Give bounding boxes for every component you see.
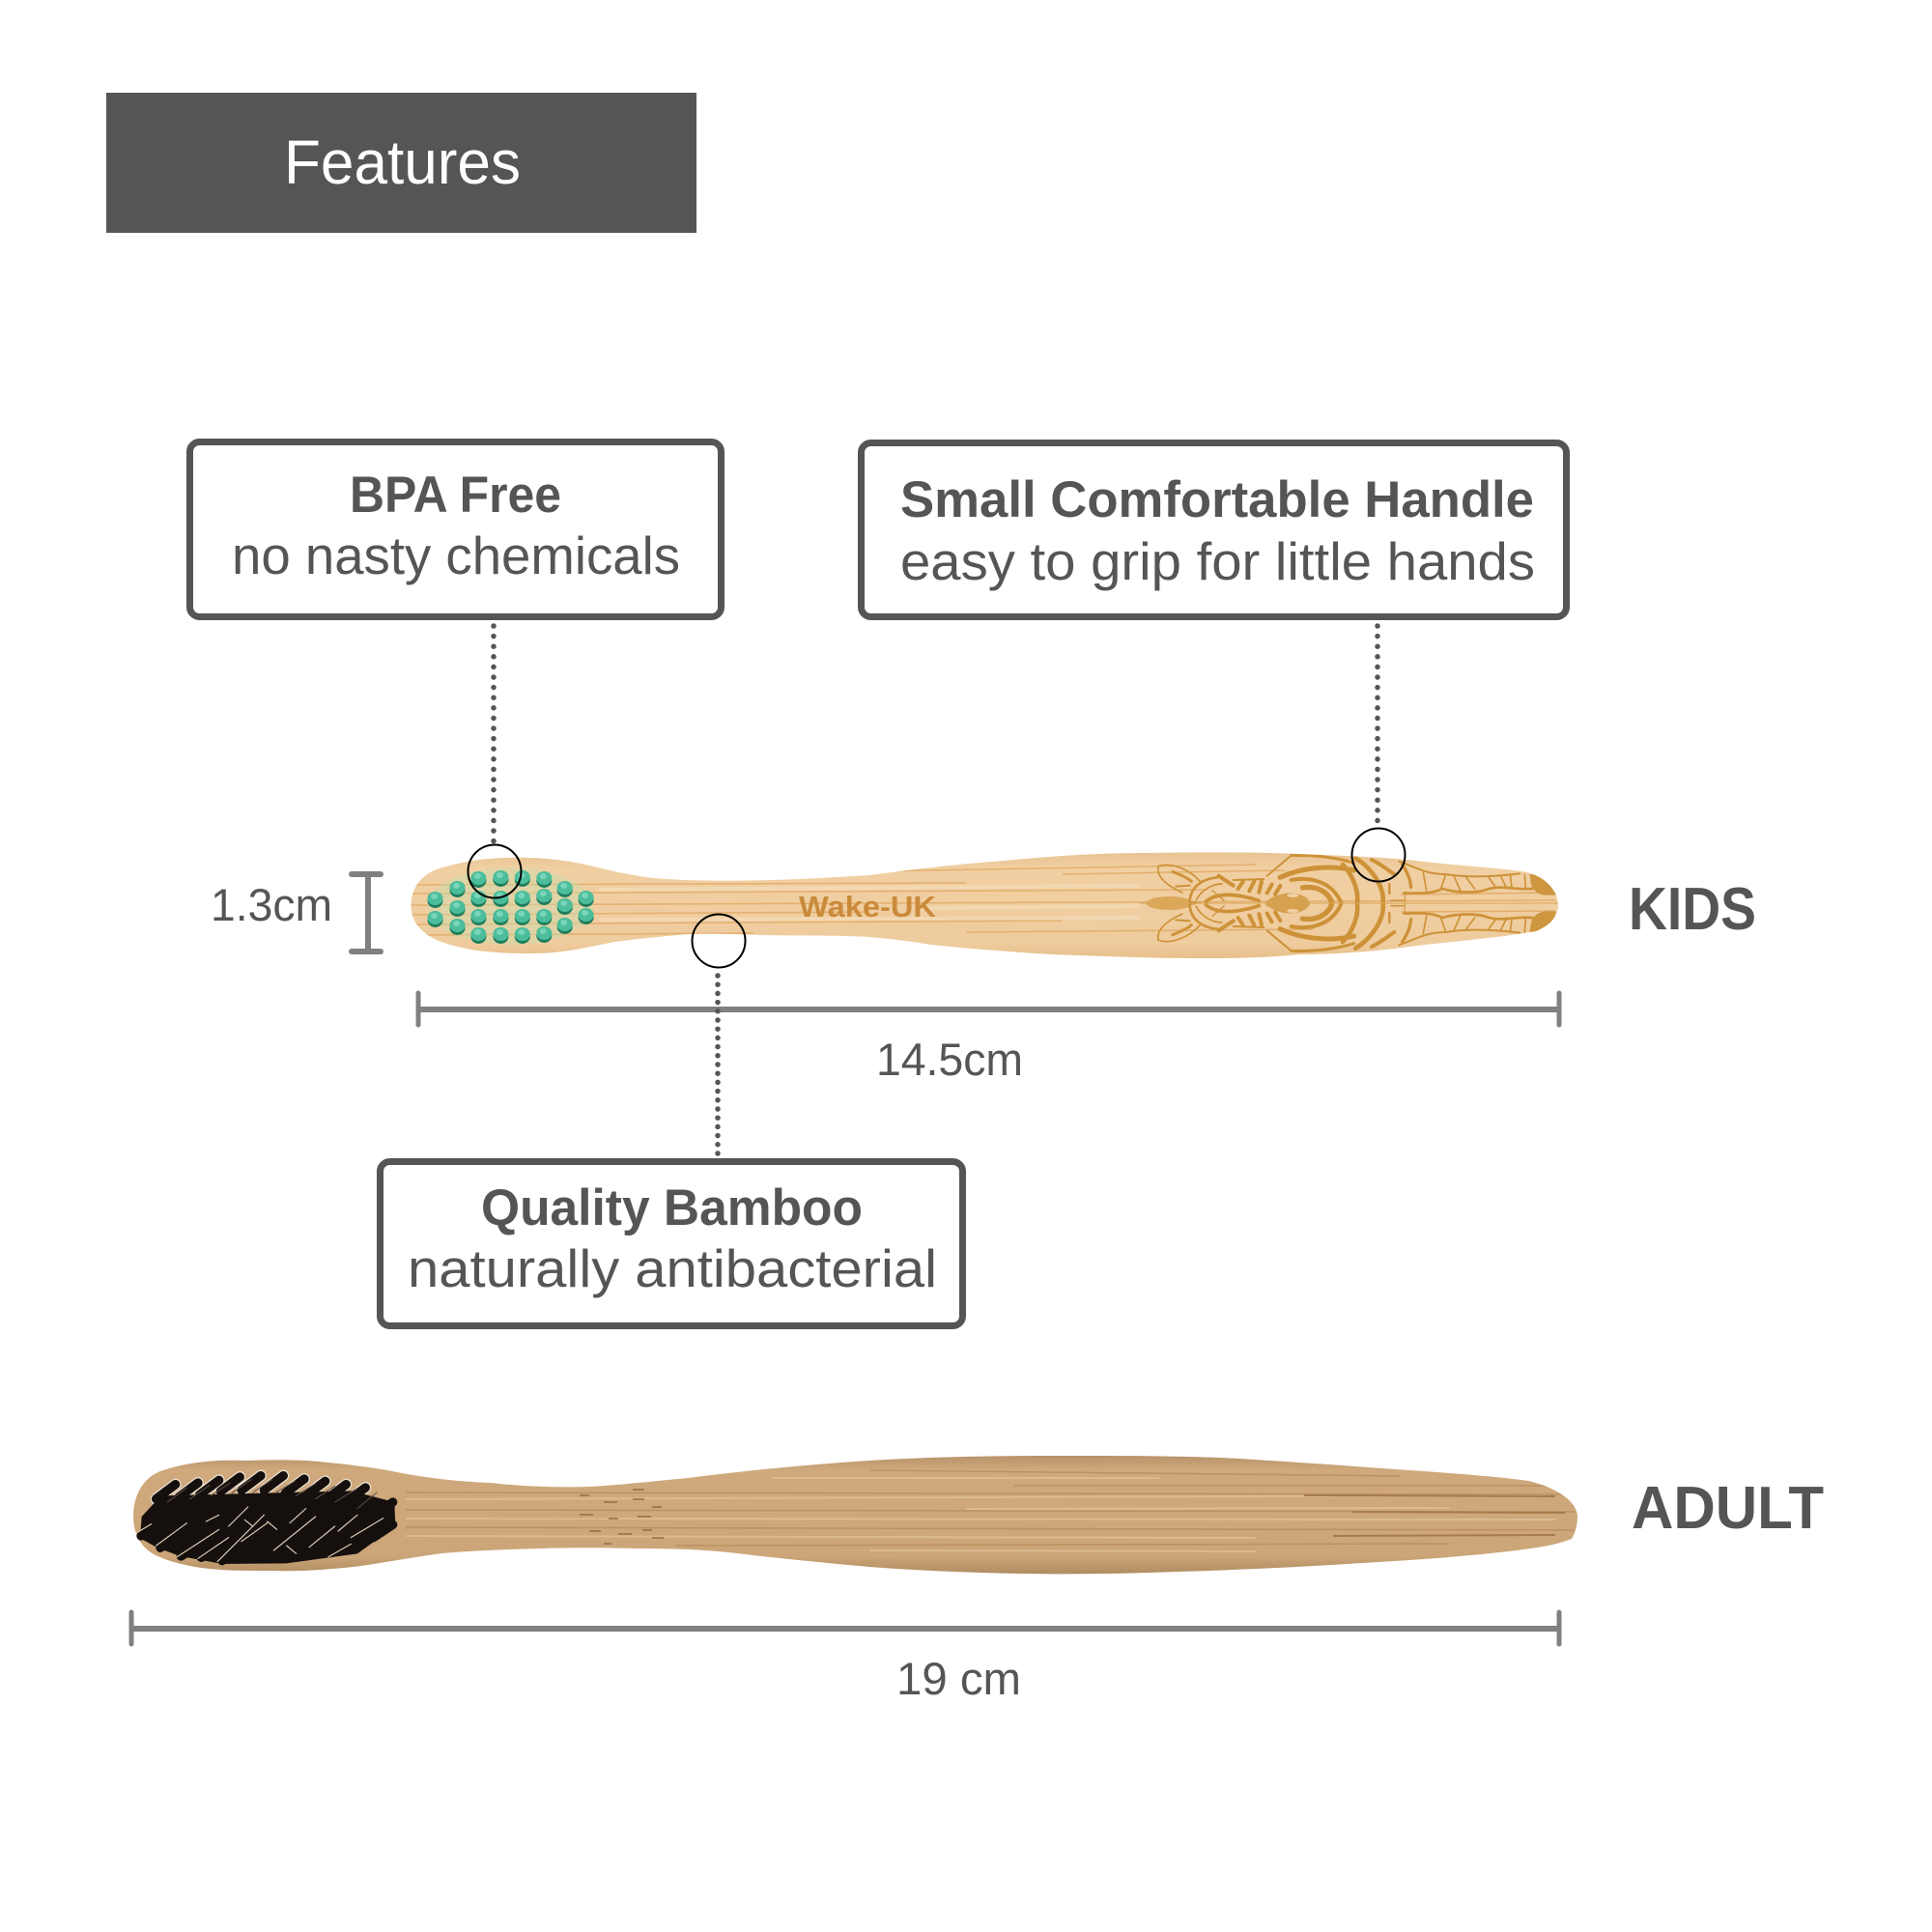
dimension: kids head height 1.3cm: 1.3cm — [211, 879, 332, 930]
heading: Features — [106, 93, 696, 233]
connector: handle callout to zebra handle — [1375, 626, 1380, 826]
label: KIDS: KIDS — [1629, 876, 1756, 943]
dimension: adult length 19 cm — [131, 1612, 1559, 1704]
label: ADULT: ADULT — [1632, 1475, 1824, 1542]
callout: Small Comfortable Handle: easy to grip for little hands — [900, 531, 1535, 591]
black bristles — [137, 1476, 395, 1564]
dimension: adult length 19 cm: 19 cm — [896, 1653, 1021, 1704]
adult toothbrush — [133, 1456, 1584, 1574]
marker circle: handle — [1352, 829, 1405, 881]
bristle bed tint — [427, 867, 593, 945]
callout: Quality Bamboo — [381, 1161, 962, 1325]
callout: BPA Free: BPA Free — [350, 467, 561, 524]
kids toothbrush — [411, 852, 1558, 958]
marker circle: bristles — [468, 844, 522, 898]
brand engraving: Wake-UK: Wake-UK — [799, 890, 937, 923]
dimension: kids length 14.5cm: 14.5cm — [876, 1034, 1023, 1085]
dimension: kids length 14.5cm — [418, 993, 1559, 1085]
heading: Features: Features — [284, 128, 521, 197]
bamboo node — [580, 1490, 664, 1544]
callout: BPA Free — [189, 442, 721, 616]
dimension: kids head height 1.3cm — [211, 874, 381, 952]
callout: Small Comfortable Handle — [862, 442, 1567, 616]
green bristles — [427, 870, 594, 944]
marker circle: bamboo neck — [692, 914, 746, 968]
connector: bamboo neck to callout — [715, 976, 721, 1156]
callout: Quality Bamboo: Quality Bamboo — [481, 1179, 863, 1236]
callout: Quality Bamboo: naturally antibacterial — [408, 1238, 937, 1298]
zebra engraving — [1140, 856, 1558, 951]
connector: BPA Free to bristles — [491, 626, 497, 842]
callout: BPA Free: no nasty chemicals — [232, 526, 680, 585]
callout: Small Comfortable Handle: Small Comfortable Handle — [900, 471, 1534, 528]
